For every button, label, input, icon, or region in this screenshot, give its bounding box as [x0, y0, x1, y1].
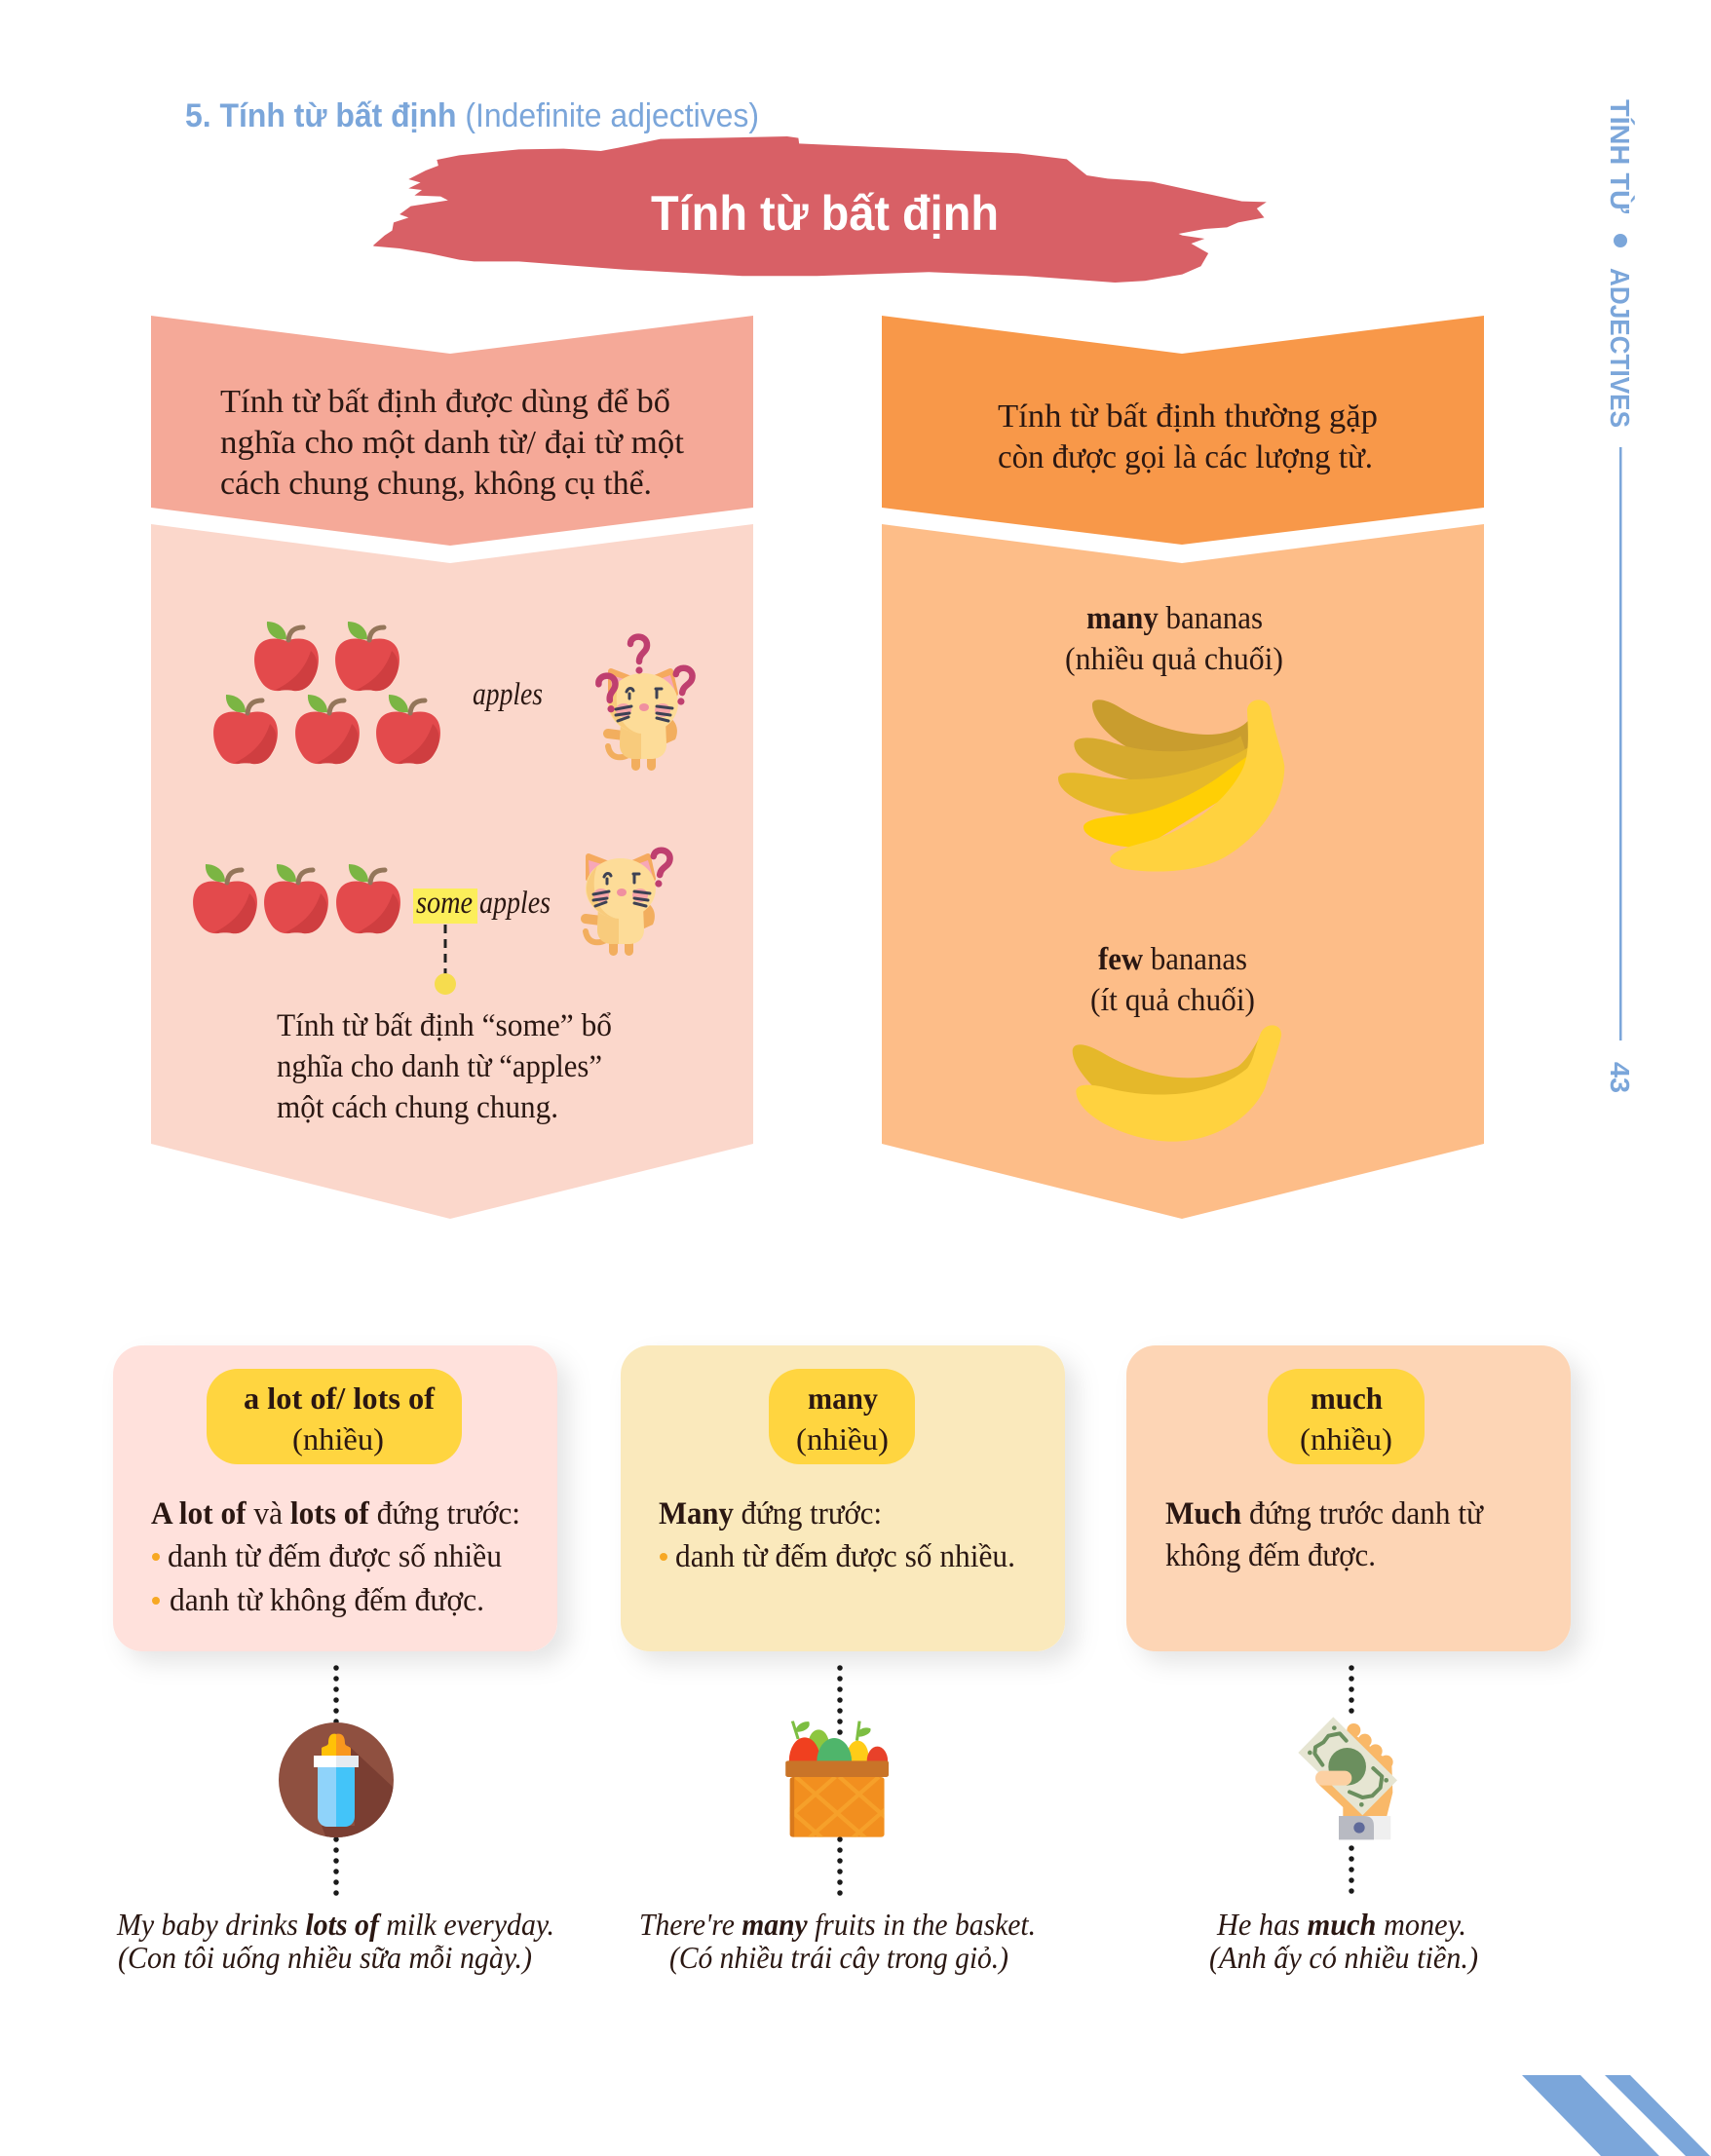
icon: two bananas	[1073, 1025, 1281, 1142]
quantifiers text	[998, 398, 1378, 475]
section heading: 5. Tính từ bất định (Indefinite adjectives)	[185, 97, 759, 134]
title brush banner	[373, 136, 1267, 283]
sidebar: chapter label: 43	[1605, 1062, 1635, 1093]
label: few bananas: few bananas	[1098, 942, 1247, 977]
connector: dashed line with dot	[435, 925, 456, 995]
panel: quantifiers	[882, 316, 1484, 1219]
icon: confused cat with one question mark	[586, 850, 671, 956]
title text: Tính từ bất định	[651, 186, 999, 241]
explanation text: Tính từ bất định “some” bổ	[277, 1008, 612, 1043]
pill: many: many	[808, 1381, 878, 1416]
card text: Many đứng trước:	[659, 1496, 882, 1532]
highlight: some	[413, 889, 477, 924]
icon: banana bunch	[1058, 700, 1284, 872]
pill: much: (nhiều)	[1300, 1421, 1392, 1456]
icon: fruit basket	[785, 1721, 889, 1837]
card text	[1165, 1496, 1484, 1573]
label: some apples: some	[416, 886, 473, 921]
explanation text: nghĩa cho danh từ “apples”	[277, 1049, 602, 1084]
card text: danh từ đếm được số nhiều	[168, 1539, 502, 1574]
card text: Much đứng trước danh từ	[1165, 1496, 1484, 1532]
pill: many	[769, 1369, 915, 1464]
caption: much example: He has much money.	[1216, 1907, 1466, 1942]
card: a lot of	[113, 1345, 557, 1651]
icon: baby bottle	[279, 1722, 394, 1837]
icon: hand holding money	[1298, 1717, 1397, 1839]
card text: không đếm được.	[1165, 1538, 1376, 1573]
icon: five apples	[213, 622, 440, 764]
caption: lots of example	[116, 1907, 554, 1975]
card text	[659, 1496, 1015, 1574]
caption: many example: There're many fruits in the basket.	[639, 1907, 1036, 1942]
label: some apples	[416, 886, 551, 921]
icon: confused cat	[597, 637, 694, 771]
definition text: Tính từ bất định được dùng để bổ	[220, 384, 670, 420]
quantifiers text: còn được gọi là các lượng từ.	[998, 439, 1373, 475]
quantifiers header chevron	[882, 316, 1484, 545]
label: many bananas: many bananas	[1086, 601, 1263, 636]
quantifiers body chevron	[882, 524, 1484, 1219]
sidebar: chapter label: TÍNH TỪ	[1605, 99, 1635, 214]
quantifiers text: Tính từ bất định thường gặp	[998, 398, 1378, 435]
card text: A lot of và lots of đứng trước:	[151, 1496, 520, 1532]
card: much	[1126, 1345, 1571, 1651]
pill: a lot of	[207, 1369, 462, 1464]
caption: lots of example: My baby drinks lots of milk everyday.	[116, 1907, 554, 1942]
caption: many example: (Có nhiều trái cây trong giỏ.)	[669, 1940, 1008, 1975]
card: many	[621, 1345, 1065, 1651]
corner decoration	[1522, 2075, 1710, 2156]
pill: many: (nhiều)	[796, 1421, 889, 1456]
panel: definition	[151, 316, 753, 1219]
icon: three apples	[193, 864, 400, 933]
caption: much example: (Anh ấy có nhiều tiền.)	[1209, 1940, 1478, 1975]
label: few bananas	[1090, 942, 1255, 1018]
sidebar: chapter label: ADJECTIVES	[1605, 268, 1635, 428]
definition body chevron	[151, 524, 753, 1219]
caption: lots of example: (Con tôi uống nhiều sữa mỗi ngày.)	[118, 1940, 532, 1975]
label: apples: apples	[473, 677, 543, 712]
definition header chevron	[151, 316, 753, 546]
caption: many example	[639, 1907, 1036, 1975]
card text: danh từ không đếm được.	[170, 1583, 484, 1618]
pill: much: much	[1311, 1381, 1383, 1416]
label: some apples: apples	[479, 886, 551, 921]
card text: danh từ đếm được số nhiều.	[675, 1539, 1015, 1574]
pill: a lot of: (nhiều)	[292, 1421, 384, 1456]
label: few bananas: (ít quả chuối)	[1090, 983, 1255, 1018]
card text	[151, 1496, 520, 1618]
definition text: nghĩa cho một danh từ/ đại từ một	[220, 425, 685, 461]
definition text	[220, 384, 685, 502]
explanation text: một cách chung chung.	[277, 1090, 558, 1125]
caption: much example	[1209, 1907, 1478, 1975]
sidebar: chapter label	[1605, 99, 1635, 1093]
pill: a lot of: a lot of/ lots of	[244, 1381, 435, 1416]
pill: much	[1268, 1369, 1425, 1464]
label: many bananas	[1065, 601, 1283, 677]
explanation text	[277, 1008, 612, 1125]
definition text: cách chung chung, không cụ thể.	[220, 466, 652, 502]
label: many bananas: (nhiều quả chuối)	[1065, 642, 1283, 677]
connector lines	[336, 1668, 1351, 1895]
